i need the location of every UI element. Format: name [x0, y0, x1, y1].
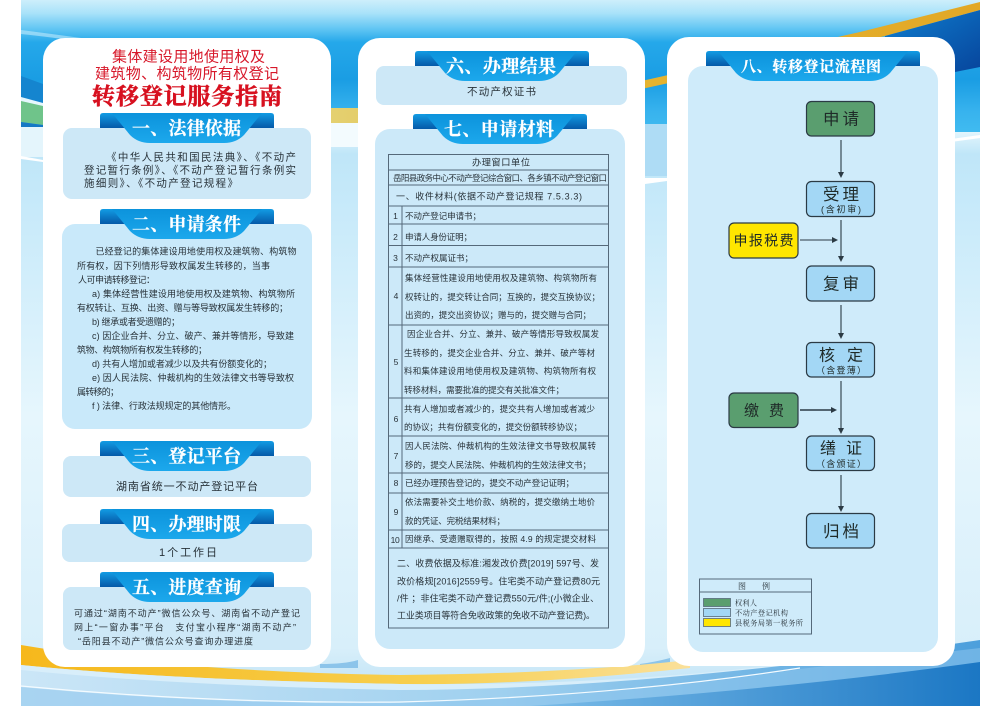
flow step: 缮证 [806, 436, 874, 470]
panel: 办理时限: 1个工作日 [159, 546, 217, 559]
table: materials: 5 [394, 357, 399, 367]
title: 转移登记服务指南 [92, 84, 282, 109]
table: materials: 申请人身份证明； [405, 232, 472, 242]
legend: 不动产登记机构 [735, 608, 788, 618]
panel: 申请条件: 人可申请转移登记： [78, 274, 155, 285]
panel: 进度查询: 网上“一窗办事”平台 支付宝小程序“湖南不动产” [74, 621, 296, 632]
panel: 转移登记流程图 [688, 51, 938, 652]
panel: 申请条件: d) 共有人增加或者减少以及共有份额变化的； [92, 358, 272, 369]
flow step: 核定: （含登薄） [816, 364, 866, 376]
table: materials [388, 154, 609, 628]
table: materials: 因人民法院、仲裁机构的生效法律文书导致权属转 [405, 441, 596, 451]
legend: 例 [762, 581, 770, 591]
panel: 申请条件: 所有权，因下列情形导致权属发生转移的，当事 [77, 260, 270, 271]
table: materials: 一、收件材料(依据不动产登记规程 7.5.3.3) [396, 190, 582, 201]
panel: middle column [358, 38, 645, 667]
flow step: 核定: 核定 [819, 346, 863, 364]
panel: 法律依据: 登记暂行条例》、《不动产登记暂行条例实 [84, 164, 296, 176]
panel: left column [43, 38, 331, 667]
table: materials: 9 [394, 507, 399, 517]
title [92, 48, 282, 109]
panel: 申请条件: a) 集体经营性建设用地使用权及建筑物、构筑物所 [92, 288, 295, 299]
table: materials: 岳阳县政务中心不动产登记综合窗口、各乡镇不动产登记窗口 [393, 173, 607, 183]
flow step: 缴费: 缴费 [744, 402, 784, 420]
table: materials: 移的，提交人民法院、仲裁机构的生效法律文书； [405, 460, 591, 470]
arrow [838, 381, 844, 434]
flow step: 核定 [806, 342, 874, 377]
arrow [800, 237, 838, 243]
panel: 申请条件: 属转移的； [77, 386, 119, 397]
panel: 申请条件: f ) 法律、行政法规规定的其他情形。 [92, 400, 236, 411]
flow step: 复审: 复审 [823, 274, 859, 294]
table: materials: 不动产权属证书； [405, 253, 473, 263]
panel: 转移登记流程图: 八、转移登记流程图 [741, 58, 881, 76]
table: materials: 集体经营性建设用地使用权及建筑物、构筑物所有 [405, 273, 597, 283]
panel: 登记平台: 三、登记平台 [132, 446, 242, 466]
panel: 办理时限: 四、办理时限 [132, 514, 241, 534]
panel: 申请条件: c) 因企业合并、分立、破产、兼并等情形，导致建 [92, 330, 294, 341]
flow step: 受理 [806, 182, 874, 216]
panel: 法律依据: 施细则》、《不动产登记规程》 [84, 176, 238, 190]
table: materials: 6 [394, 414, 399, 424]
legend: 图 [738, 582, 746, 591]
table: materials: 权转让的，提交转让合同；互换的，提交互换协议； [405, 292, 600, 302]
panel: right column [667, 37, 955, 666]
panel: 法律依据: 《中华人民共和国民法典》、《不动产 [106, 150, 296, 164]
panel: 申请条件: e) 因人民法院、仲裁机构的生效法律文书等导致权 [92, 372, 294, 383]
legend: 权利人 [735, 598, 757, 608]
table: materials: 因继承、受遗赠取得的，按照 4.9 的规定提交材料 [405, 534, 596, 544]
table: materials: 7 [394, 451, 399, 461]
table: materials: 已经办理预告登记的，提交不动产登记证明； [405, 478, 574, 488]
table: materials: 二、收费依据及标准:湘发改价费[2019] 597号、发 [397, 557, 599, 568]
table: materials: 的协议；共有份额变化的，提交份额转移协议； [404, 422, 582, 432]
table: materials: 改价格规[2016]2559号。住宅类不动产登记费80元 [397, 575, 600, 586]
panel: 登记平台: 湖南省统一不动产登记平台 [116, 479, 258, 493]
table: materials: 生转移的，提交企业合并、分立、兼并、破产等材 [404, 348, 595, 358]
panel: 进度查询: “岳阳县不动产”微信公众号查询办理进度 [78, 635, 253, 646]
table: materials: 8 [394, 478, 399, 488]
flow step: 缮证: （含颁证） [816, 458, 866, 469]
flow step: 受理: (含初审) [821, 204, 861, 214]
flow step: 申请 [806, 102, 874, 136]
panel: 申请条件: 已经登记的集体建设用地使用权及建筑物、构筑物 [96, 246, 296, 256]
panel: 申请条件: 二、申请条件 [132, 214, 241, 234]
panel: 办理结果: 六、办理结果 [446, 56, 556, 76]
table: materials: 依法需要补交土地价款、纳税的，提交缴纳土地价 [405, 497, 595, 507]
table: materials: 3 [393, 253, 398, 263]
flow step: 归档 [806, 514, 874, 548]
panel: 进度查询 [63, 572, 311, 650]
title: 建筑物、构筑物所有权登记 [95, 66, 279, 82]
panel: 法律依据: 一、法律依据 [132, 118, 241, 138]
arrow [838, 140, 844, 178]
flow step: 缮证: 缮证 [820, 440, 862, 458]
panel: 申请材料: 七、申请材料 [444, 118, 554, 140]
panel: 申请条件: 有权转让、互换、出资、赠与等导致权属发生转移的； [77, 302, 288, 313]
flow step: 缴费 [729, 393, 798, 428]
panel: 法律依据 [63, 113, 311, 199]
table: materials: 转移材料，需要批准的提交有关批准文件； [404, 385, 564, 395]
legend: 县税务局第一税务所 [735, 618, 803, 628]
panel: 申请条件 [62, 209, 312, 429]
table: materials: 出资的，提交出资协议；赠与的，提交赠与合同； [405, 310, 591, 320]
table: materials: 因企业合并、分立、兼并、破产等情形导致权属发 [407, 329, 599, 339]
flow step: 申报税费: 申报税费 [734, 232, 794, 248]
title: 集体建设用地使用权及 [112, 48, 265, 66]
table: materials: 料和集体建设用地使用权及建筑物、构筑物所有权 [404, 366, 596, 376]
flow step: 申报税费 [729, 223, 798, 258]
panel: 申请条件: 筑物、构筑物所有权发生转移的； [77, 344, 207, 355]
flow step: 复审 [806, 266, 874, 301]
arrow [838, 475, 844, 512]
table: materials: 2 [393, 232, 398, 242]
table: materials: /件 ；非住宅类不动产登记费550元/件;(小微企业、 [397, 592, 599, 603]
table: materials: 办理窗口单位 [472, 156, 530, 168]
arrow [800, 407, 837, 413]
flow step: 申请: 申请 [823, 110, 859, 128]
table: materials: 1 [393, 211, 398, 221]
panel: 申请材料 [375, 114, 625, 649]
arrow [838, 305, 844, 339]
legend [699, 579, 812, 634]
panel: 办理结果: 不动产权证书 [467, 85, 536, 98]
panel: 进度查询: 五、进度查询 [132, 576, 241, 598]
table: materials: 工业类项目等符合免收政策的免收不动产登记费)。 [397, 609, 595, 620]
panel: 进度查询: 可通过“湖南不动产”微信公众号、湖南省不动产登记 [74, 607, 300, 618]
table: materials: 不动产登记申请书； [405, 211, 481, 221]
table: materials: 4 [394, 291, 399, 301]
panel: 申请条件: b) 继承或者受遗赠的； [92, 316, 180, 327]
flow step: 受理: 受理 [823, 185, 859, 204]
panel: 办理时限 [62, 509, 312, 562]
table: materials: 10 [391, 535, 400, 545]
arrow [838, 220, 844, 262]
panel: 办理结果 [376, 51, 627, 105]
flow step: 归档: 归档 [823, 522, 859, 541]
table: materials: 款的凭证、完税结果材料； [405, 516, 505, 526]
table: materials: 共有人增加或者减少的，提交共有人增加或者减少 [404, 404, 595, 414]
panel: 登记平台 [63, 441, 311, 497]
